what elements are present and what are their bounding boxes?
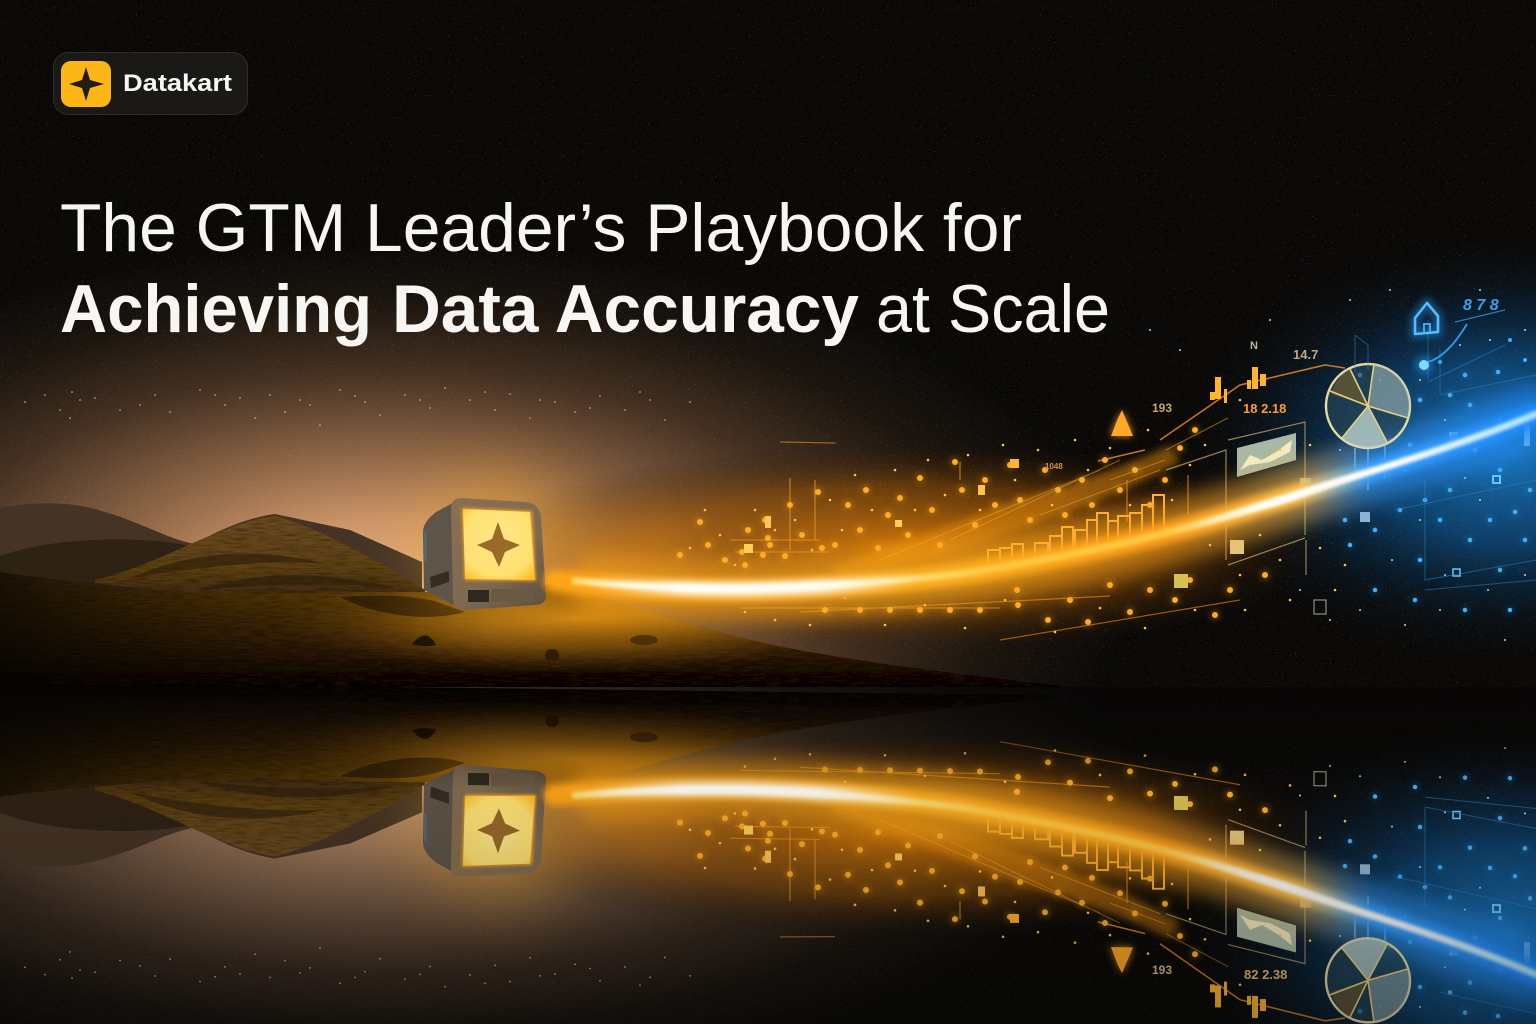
upper blue particles (1150, 290, 1525, 395)
title: at Scale (876, 271, 1110, 347)
pie chart (1326, 364, 1410, 448)
chart numbers: 1048 (1045, 462, 1063, 471)
logo badge: Datakart (123, 70, 232, 97)
foreground hill (0, 563, 1060, 687)
blue particle glow (1300, 372, 1536, 640)
title: Achieving (60, 271, 372, 347)
title: Data Accuracy (392, 271, 859, 347)
icon: house (1415, 303, 1505, 374)
data panels and bar charts (730, 365, 1385, 640)
chart numbers: 82 2.38 (1244, 967, 1287, 982)
title (60, 190, 1110, 347)
chart numbers: 193 (1152, 963, 1172, 977)
chart numbers: 18 2.18 (1243, 401, 1286, 416)
distant hills (0, 503, 425, 687)
chart numbers: N (1250, 340, 1258, 352)
title: The GTM Leader’s Playbook for (60, 190, 1022, 266)
glowing Datakart box (418, 470, 710, 620)
star band (25, 388, 690, 425)
night sky glow (0, 0, 1536, 687)
map panel (1237, 433, 1296, 477)
light beam (555, 414, 1536, 592)
chart numbers (1045, 297, 1499, 982)
ribbon of light above beam (830, 445, 1180, 578)
reflected sky (0, 687, 1536, 1024)
water reflection (0, 682, 1536, 1024)
logo badge (54, 52, 248, 114)
orange particle glow (680, 400, 1345, 632)
chart numbers: 8 7 8 (1463, 297, 1499, 314)
chart numbers: 193 (1152, 401, 1172, 415)
small bar charts above the beam (1210, 367, 1266, 403)
chart numbers: 14.7 (1293, 347, 1318, 362)
icon: logo star (61, 61, 111, 107)
icon: warning triangle (1110, 410, 1133, 436)
